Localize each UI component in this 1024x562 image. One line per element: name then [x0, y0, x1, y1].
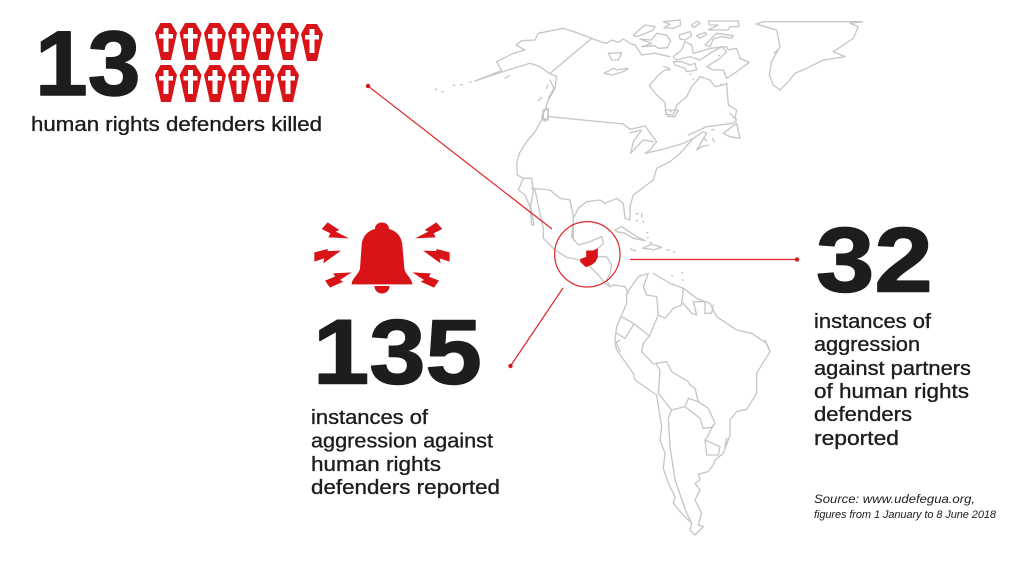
highlight circle around Guatemala: [555, 222, 620, 287]
source note: [814, 492, 997, 521]
caption: aggression against partners: defenders: [814, 404, 912, 426]
connector line: killed: [366, 84, 552, 229]
caption: killed: human rights defenders killed: [31, 114, 322, 136]
caption: aggression against partners: [814, 311, 971, 450]
icon: coffins: [155, 23, 323, 102]
caption: aggression against defenders: human rights: [311, 454, 441, 476]
caption: aggression against partners: reported: [814, 428, 899, 450]
source note: figures from 1 January to 8 June 2018: [814, 509, 997, 521]
caption: aggression against defenders: aggression against: [311, 430, 493, 452]
stat: 13 killed: [31, 11, 323, 136]
connector line: aggression: [508, 288, 563, 368]
number 13: 13: [35, 11, 140, 115]
map: Guatemala highlighted: [581, 249, 597, 267]
map: South America: [615, 340, 770, 535]
caption: aggression against defenders: [311, 407, 500, 499]
caption: aggression against partners: of human rights: [814, 381, 969, 403]
map: Mexico, Central America, Caribbean and north of South America: [532, 188, 770, 352]
stat: 32 partners: [814, 208, 971, 450]
caption: aggression against partners: aggression: [814, 334, 920, 356]
source note: Source: www.udefegua.org,: [814, 492, 975, 506]
number 32: 32: [816, 208, 933, 311]
map: Canadian Arctic and Hudson Bay: [590, 20, 749, 118]
connector line: partners: [630, 257, 799, 262]
caption: aggression against defenders: instances of: [311, 407, 428, 429]
map: United States and eastern Canada: [517, 110, 740, 240]
caption: aggression against defenders: defenders reported: [311, 477, 500, 499]
number 135: 135: [313, 301, 482, 403]
caption: aggression against partners: instances of: [814, 311, 931, 333]
map of the Americas: [435, 20, 863, 535]
caption: aggression against partners: against partners: [814, 358, 971, 380]
stat: 135 aggressions: [311, 301, 500, 499]
map: Alaska, west coast and Greenland: [435, 22, 863, 122]
icon: alarm bell: [314, 222, 450, 293]
